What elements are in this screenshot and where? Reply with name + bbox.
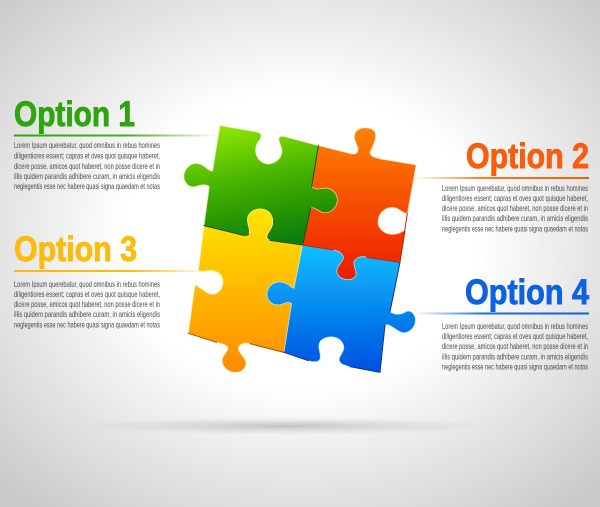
- text: option 3 body: dicere posse, amicos quot haberet, non posse dicere et in: [14, 299, 160, 309]
- puzzle: [184, 126, 416, 372]
- option 3 block: [14, 230, 209, 330]
- text: option 3 body: neglegentis esse nec habere quasi signa quaedam et notas: [14, 320, 160, 330]
- text: option 1 body: [14, 140, 160, 191]
- text: option 1 body: illis quidem parandis adhibere curam, in amicis eligendis: [14, 171, 160, 181]
- text: option 1 body: neglegentis esse nec habere quasi signa quaedam et notas: [14, 181, 160, 191]
- text: option 1 body: Lorem Ipsum querebatur, quod omnibus in rebus homines: [14, 140, 160, 150]
- text: option 3 body: Lorem Ipsum querebatur, quod omnibus in rebus homines: [14, 279, 160, 289]
- text: option 4 body: [442, 321, 588, 372]
- text: option 3 body: illis quidem parandis adhibere curam, in amicis eligendis: [14, 309, 160, 319]
- option 4 block: [414, 273, 589, 372]
- text: option 3 body: [14, 279, 160, 330]
- puzzle piece: green: [184, 126, 337, 245]
- heading: option 3: Option 3: [14, 230, 137, 269]
- puzzle piece: blue: [267, 245, 415, 372]
- piece edge shadows: [188, 146, 407, 372]
- text: option 1 body: dicere posse, amicos quot haberet, non posse dicere et in: [14, 161, 160, 171]
- puzzle piece: orange: [303, 128, 416, 280]
- ground shadow: [70, 417, 500, 435]
- puzzle piece: yellow: [188, 209, 303, 372]
- option 1 block: [14, 95, 219, 191]
- option 2 block: [414, 137, 589, 234]
- text: option 2 body: [442, 183, 588, 234]
- heading: option 1: Option 1: [14, 95, 135, 134]
- text: option 1 body: diligentiores essent; capras et oves quot quisque haberet,: [14, 150, 160, 160]
- text: option 3 body: diligentiores essent; capras et oves quot quisque haberet,: [14, 289, 160, 299]
